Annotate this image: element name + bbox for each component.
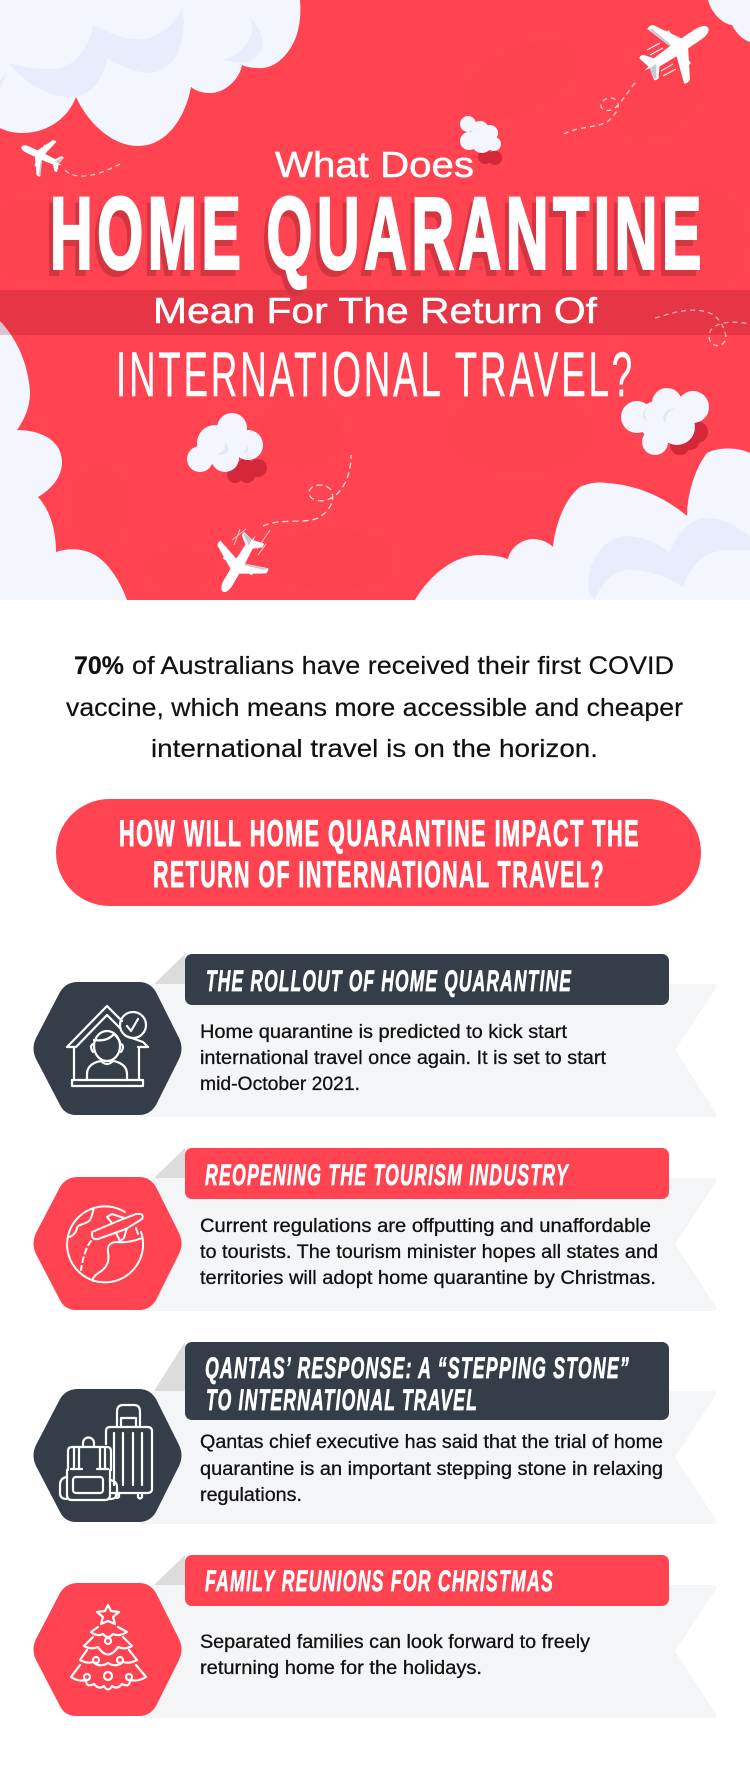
title line: Mean For The Return Of: Mean For The Return Of (153, 290, 598, 331)
body text (200, 1022, 607, 1095)
intro paragraph: of Australians have received their first COVID (132, 652, 674, 680)
body text: mid-October 2021. (200, 1074, 360, 1095)
cloud: small top (460, 116, 502, 165)
hexagon with globe and plane icon (34, 1177, 182, 1310)
body text: regulations. (200, 1485, 302, 1506)
intro paragraph: 70% (74, 652, 124, 680)
cloud: left (0, 321, 127, 600)
cloud: small middle (187, 413, 267, 483)
body text: Qantas chief executive has said that the trial of home (200, 1432, 663, 1453)
cloud: small right (621, 388, 709, 455)
body text: international travel once again. It is set to start (200, 1048, 607, 1069)
body text: to tourists. The tourism minister hopes all states and (200, 1242, 658, 1263)
plane: top right with dashed trail (564, 0, 727, 134)
panel: family reunions for christmas (34, 1555, 716, 1718)
body text (200, 1632, 591, 1679)
heading bar: TO INTERNATIONAL TRAVEL (206, 1384, 478, 1417)
panel: qantas response (34, 1342, 716, 1524)
band behind subtitle (0, 290, 750, 335)
panel: reopening the tourism industry (34, 1148, 716, 1311)
cloud: bottom right (415, 448, 750, 600)
hexagon with house icon (34, 982, 182, 1115)
body text (200, 1216, 658, 1289)
plane: top left with dashed trail (13, 129, 120, 183)
heading bar (185, 1342, 669, 1420)
title line: What Does: What Does (275, 144, 474, 185)
intro paragraph: international travel is on the horizon. (151, 735, 598, 763)
body text: returning home for the holidays. (200, 1658, 482, 1679)
body text (200, 1432, 663, 1506)
body text: Home quarantine is predicted to kick start (200, 1022, 568, 1043)
body text: territories will adopt home quarantine by Christmas. (200, 1268, 656, 1289)
intro paragraph (66, 652, 683, 763)
cloud: top right (708, 0, 750, 42)
panel: hero banner (0, 0, 750, 606)
cloud: top left (0, 0, 300, 146)
body text: quarantine is an important stepping stone in relaxing (200, 1459, 663, 1480)
heading pill (56, 799, 701, 906)
heading bar (185, 1555, 669, 1606)
title (46, 144, 706, 410)
panel: the rollout of home quarantine (34, 954, 716, 1117)
heading bar (185, 1148, 669, 1199)
plane: right dashed trail (655, 310, 750, 346)
heading bar (185, 954, 669, 1005)
intro paragraph: vaccine, which means more accessible and cheaper (66, 694, 683, 722)
body text: Separated families can look forward to freely (200, 1632, 591, 1653)
plane: bottom with dashed trail (198, 455, 351, 606)
hexagon with christmas tree icon (34, 1583, 182, 1716)
body text: Current regulations are offputting and unaffordable (200, 1216, 651, 1237)
hexagon with luggage icon (34, 1389, 182, 1522)
